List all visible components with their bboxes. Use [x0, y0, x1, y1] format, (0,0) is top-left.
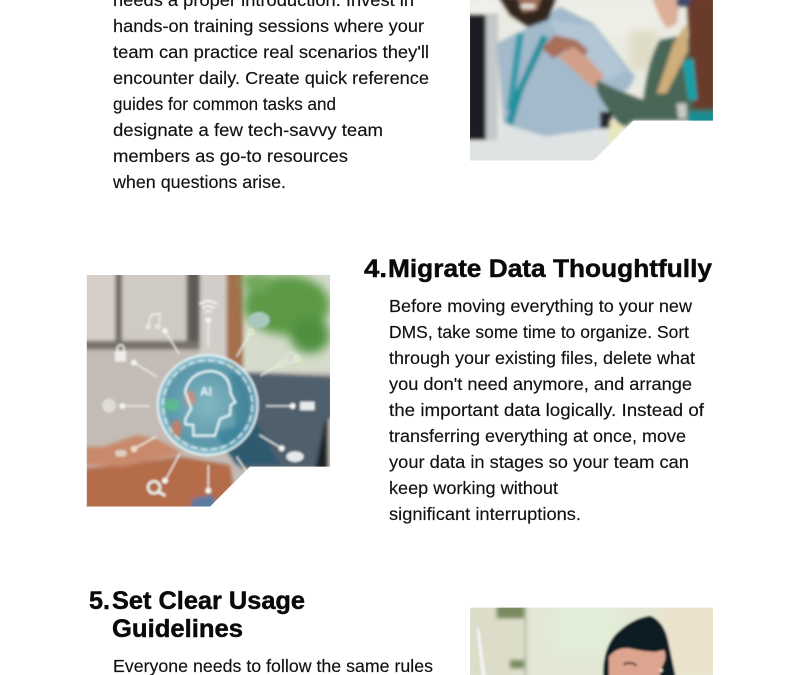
section 4 body text: through your existing files, delete what: [389, 348, 695, 368]
photo: colleagues fist bump at help desk: [467, 0, 717, 163]
section 4 body text: keep working without: [389, 478, 558, 498]
section 4 body text: DMS, take some time to organize. Sort: [389, 322, 689, 342]
section 3 body text: guides for common tasks and: [113, 94, 336, 114]
section 3 body text: [112, 0, 429, 192]
section 4 body text: [389, 296, 704, 524]
section 3 body text: team can practice real scenarios they'll: [113, 42, 429, 62]
section 3 body text: encounter daily. Create quick reference: [113, 68, 429, 88]
heading: 5. Set Clear Usage Guidelines: Guidelines: [112, 615, 243, 643]
photo: woman working at laptop: [467, 604, 717, 675]
section 4 body text: transferring everything at once, move: [389, 426, 686, 446]
heading: 5. Set Clear Usage Guidelines: [89, 587, 305, 643]
section 3 body text: when questions arise.: [112, 172, 286, 192]
heading: 4. Migrate Data Thoughtfully: Migrate Data Thoughtfully: [388, 255, 712, 283]
section 4 body text: your data in stages so your team can: [389, 452, 689, 472]
photo: hands typing with AI head hologram: AI: [200, 385, 212, 399]
section 4 body text: you don't need anymore, and arrange: [389, 374, 692, 394]
section 4 body text: significant interruptions.: [389, 504, 581, 524]
heading: 4. Migrate Data Thoughtfully: 4.: [364, 255, 387, 283]
photo: hands typing with AI head hologram: [83, 272, 335, 510]
section 3 body text: hands-on training sessions where your: [113, 16, 424, 36]
heading: 5. Set Clear Usage Guidelines: Set Clear Usage: [112, 587, 305, 615]
section 4 body text: Before moving everything to your new: [389, 296, 692, 316]
heading: 5. Set Clear Usage Guidelines: 5.: [89, 587, 110, 615]
section 3 body text: members as go-to resources: [113, 146, 348, 166]
icons around hologram: [102, 301, 315, 496]
section 3 body text: designate a few tech-savvy team: [113, 120, 383, 140]
section 4 body text: the important data logically. Instead of: [389, 400, 704, 420]
